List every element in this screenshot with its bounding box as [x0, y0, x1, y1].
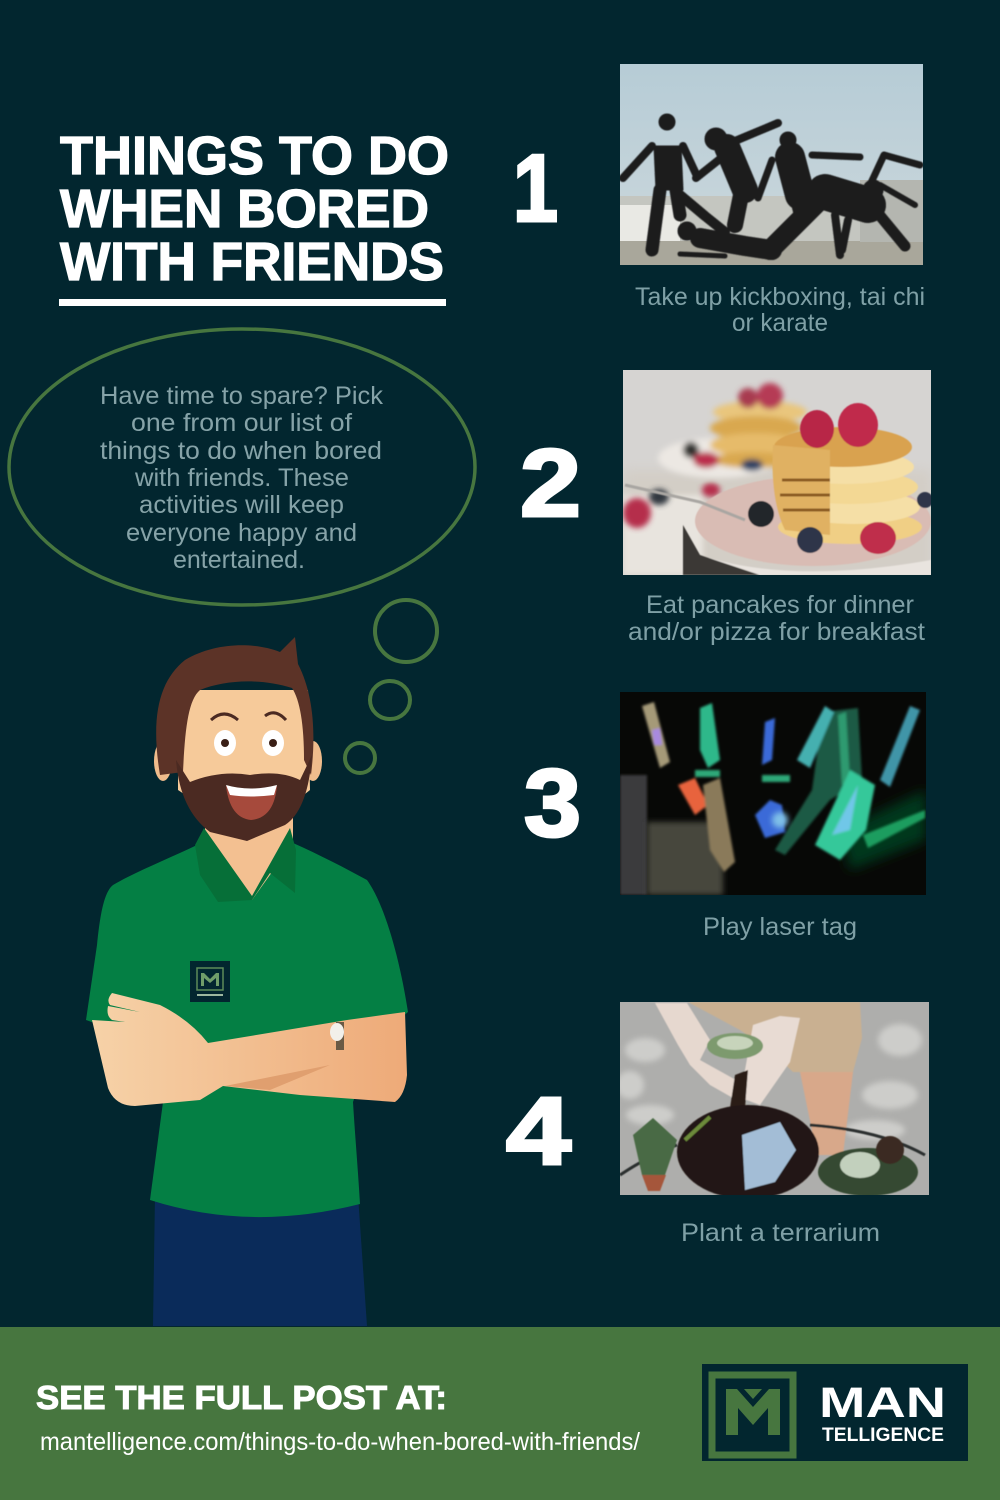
- caption 1: or karate: [732, 309, 828, 337]
- intro text: with friends. These: [134, 464, 349, 492]
- face: [178, 690, 310, 838]
- thought bubble: [9, 329, 475, 773]
- hair: [156, 637, 313, 775]
- intro text: things to do when bored: [100, 437, 382, 465]
- thought circles: [345, 600, 437, 773]
- number 3: 3: [524, 750, 581, 857]
- caption 4: Plant a terrarium: [681, 1219, 880, 1247]
- intro text: everyone happy and: [126, 519, 357, 547]
- caption 2: Eat pancakes for dinner: [646, 591, 914, 619]
- collar: [195, 828, 296, 902]
- logo: [702, 1364, 968, 1461]
- caption 1: [635, 283, 925, 337]
- photo: pancakes: [623, 370, 933, 575]
- intro text: [100, 382, 383, 574]
- intro text: entertained.: [173, 546, 305, 574]
- footer band: [0, 1327, 1000, 1500]
- title: THINGS TO DO: [60, 126, 449, 186]
- title: WHEN BORED: [60, 179, 429, 239]
- number 1: 1: [513, 135, 558, 242]
- footer heading: SEE THE FULL POST AT:: [36, 1379, 447, 1416]
- ears: [154, 741, 172, 781]
- photo: martial arts group: [620, 64, 923, 265]
- wristwatch: [330, 1022, 344, 1050]
- caption 2: and/or pizza for breakfast: [628, 618, 925, 646]
- shirt badge: [190, 961, 230, 1002]
- caption 2: [628, 591, 925, 646]
- intro text: activities will keep: [139, 491, 344, 519]
- number 4: 4: [506, 1078, 571, 1185]
- title: [59, 126, 449, 306]
- neck: [205, 815, 293, 902]
- caption 3: Play laser tag: [703, 913, 857, 941]
- shirt: [86, 843, 408, 1217]
- mouth: [226, 785, 277, 820]
- illustration: smiling man with crossed arms: [86, 637, 408, 1326]
- eyes: [211, 713, 286, 756]
- beard: [176, 755, 312, 841]
- caption 1: Take up kickboxing, tai chi: [635, 283, 925, 311]
- photo: laser tag: [620, 692, 926, 895]
- trousers: [153, 1195, 367, 1326]
- logo: MAN: [819, 1379, 946, 1427]
- logo: TELLIGENCE: [822, 1425, 944, 1446]
- photo: planting a terrarium: [616, 1002, 929, 1199]
- footer url: mantelligence.com/things-to-do-when-bored-with-friends/: [40, 1428, 640, 1456]
- title: WITH FRIENDS: [60, 232, 444, 292]
- intro text: one from our list of: [131, 409, 352, 437]
- number 2: 2: [520, 430, 581, 537]
- intro text: Have time to spare? Pick: [100, 382, 383, 410]
- crossed arms: [92, 993, 407, 1106]
